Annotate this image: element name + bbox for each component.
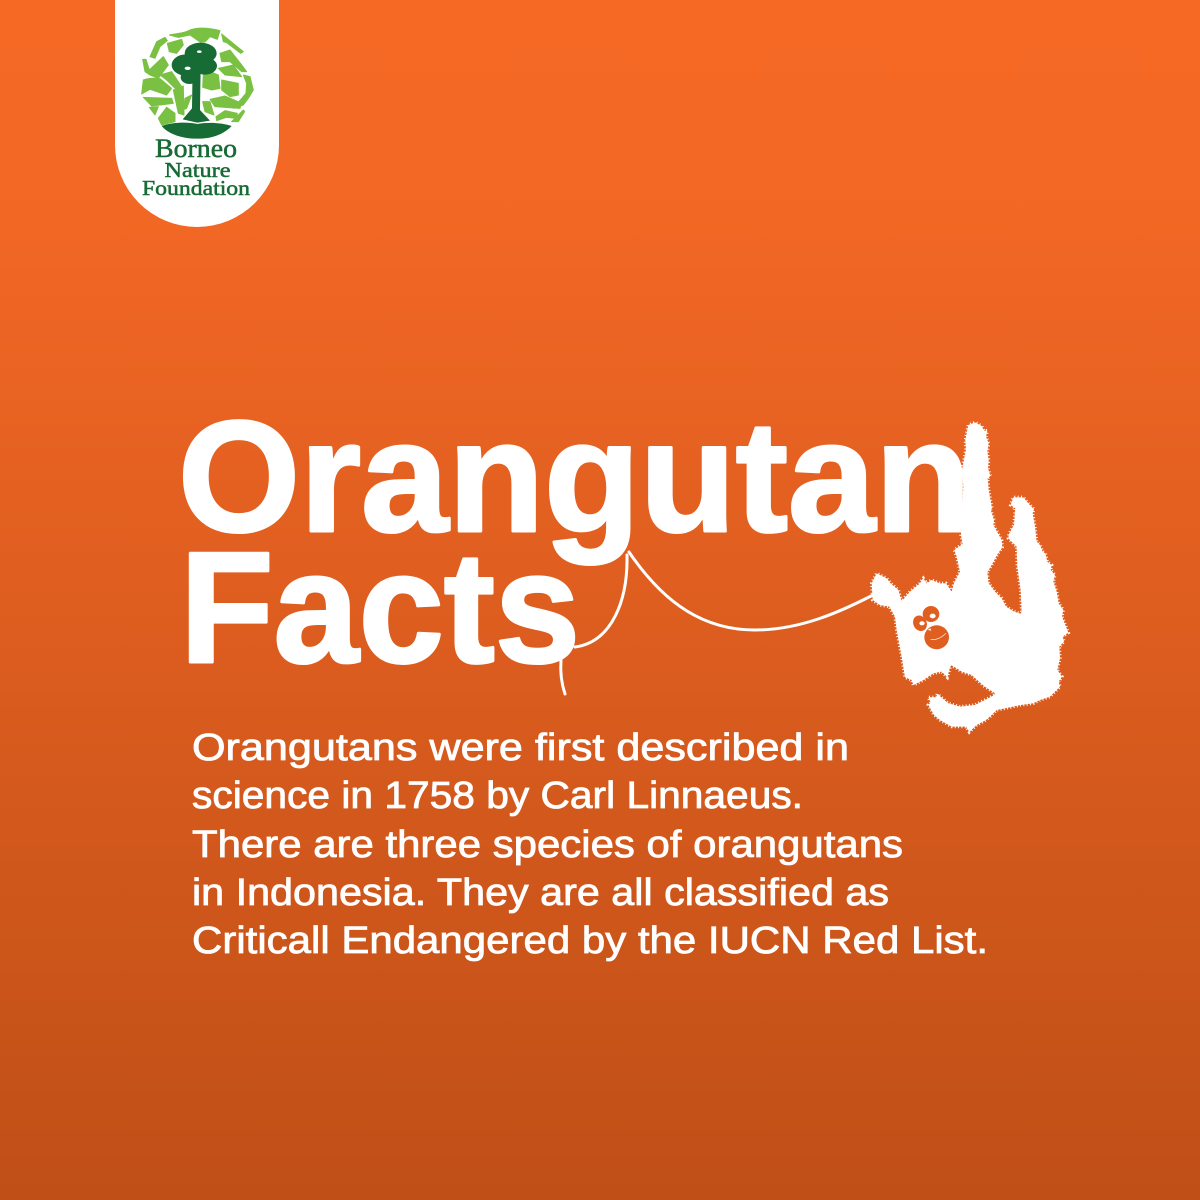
- title: [178, 389, 971, 696]
- rope lines: [561, 552, 873, 694]
- icon: ground: [162, 123, 232, 139]
- logo wordmark: Foundation: [142, 176, 251, 200]
- icon: ring of animals: [142, 28, 253, 125]
- logo wordmark: [142, 134, 251, 200]
- icon: tree: [172, 43, 217, 123]
- body text: Criticall Endangered by the IUCN Red List.: [192, 920, 988, 962]
- title: Facts: [180, 520, 580, 696]
- icon: face: [911, 606, 949, 649]
- body text: in Indonesia. They are all classified as: [192, 872, 889, 914]
- logo wordmark: Nature: [164, 158, 230, 182]
- body text: [192, 727, 988, 962]
- body text: science in 1758 by Carl Linnaeus.: [192, 775, 803, 817]
- icon: orangutan silhouette: [872, 422, 1068, 732]
- title: Orangutan: [178, 389, 971, 565]
- body text: There are three species of orangutans: [192, 824, 903, 866]
- logo wordmark: Borneo: [155, 134, 237, 163]
- body text: Orangutans were first described in: [192, 727, 849, 769]
- logo: Borneo Nature Foundation: [115, 0, 279, 227]
- logo emblem: [142, 28, 253, 139]
- logo tab: [115, 0, 279, 227]
